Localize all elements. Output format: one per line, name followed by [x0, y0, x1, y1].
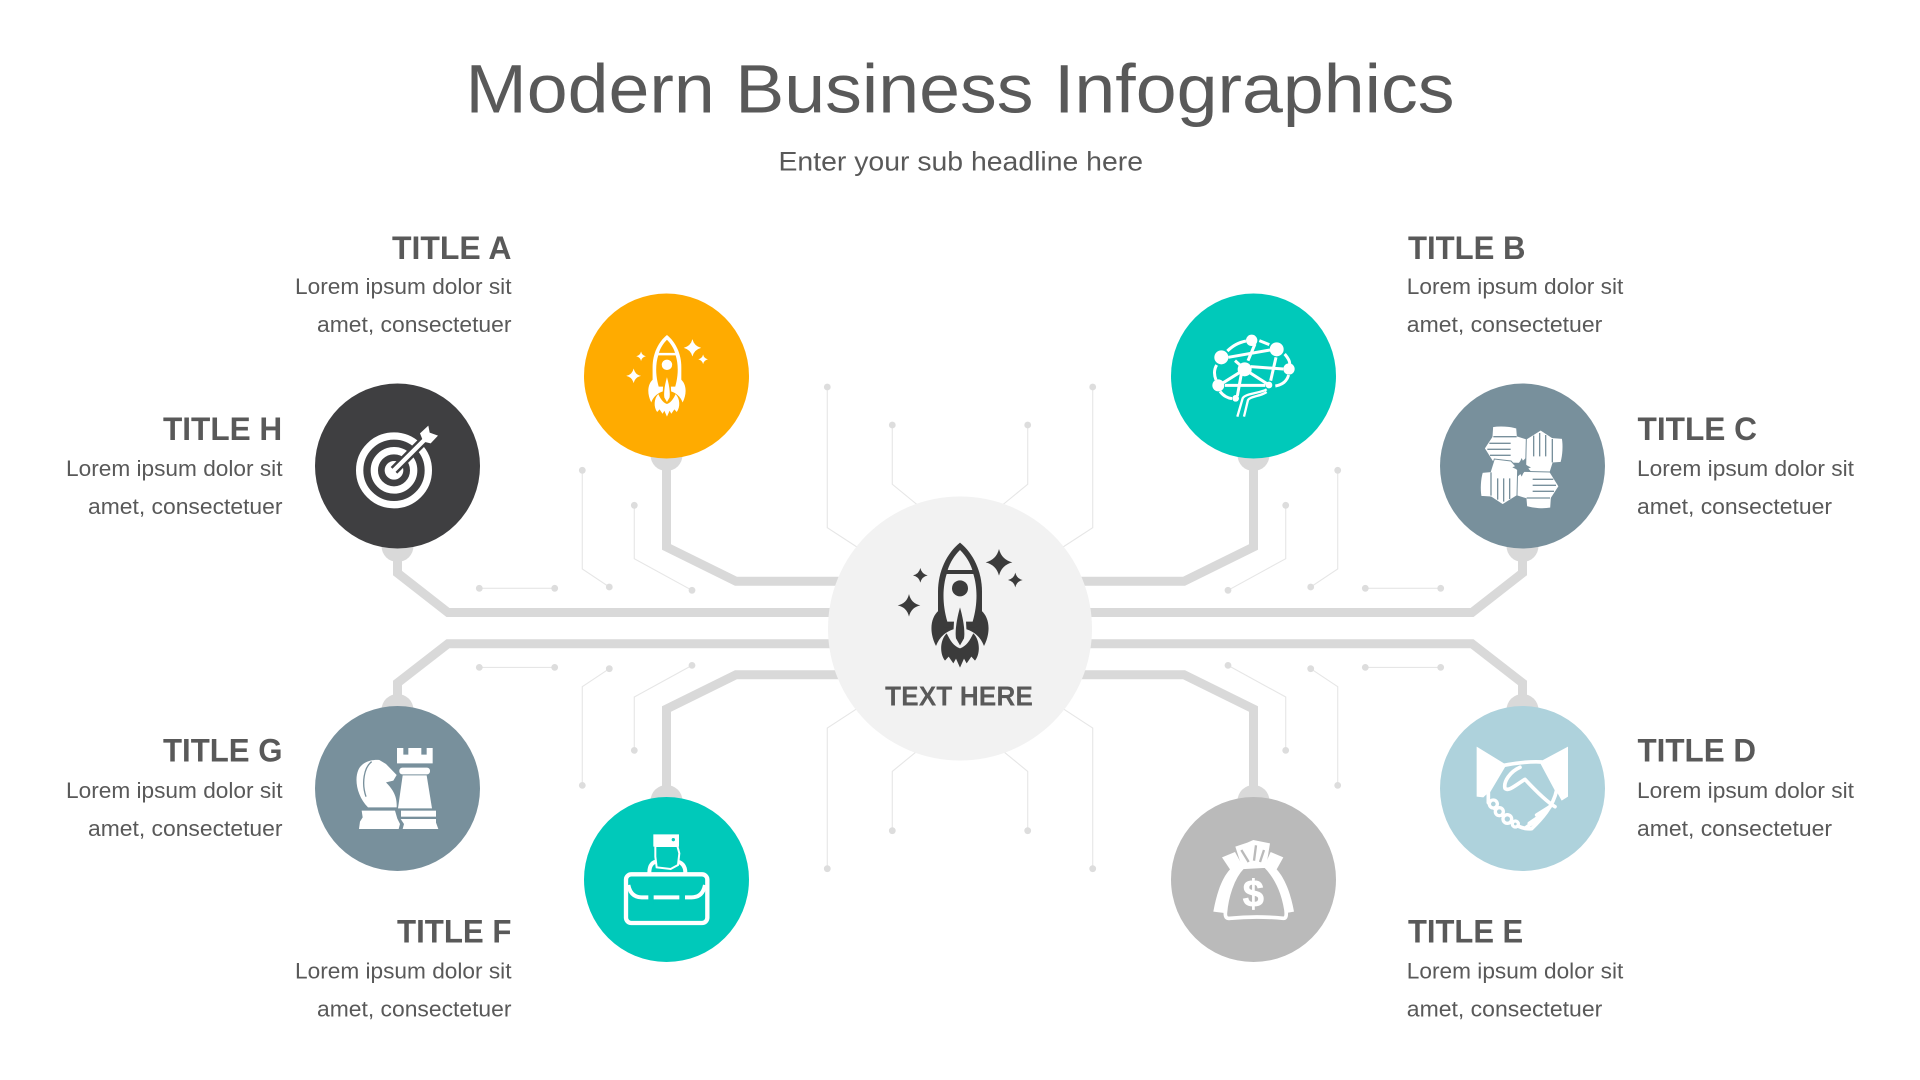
- central label: TEXT HERE: [885, 681, 1033, 712]
- icon: central rocket: [898, 543, 1023, 668]
- text: Title H: Lorem ipsum dolor sit: [66, 456, 282, 481]
- node E: grey circle with money bag: [1171, 797, 1336, 962]
- text: Title B: Lorem ipsum dolor sit: [1407, 274, 1623, 299]
- text: Title E: Lorem ipsum dolor sit: [1407, 959, 1623, 984]
- node H: dark circle with target: [315, 384, 480, 548]
- text: Title H: amet, consectetuer: [88, 494, 282, 519]
- node A: orange circle with rocket: [584, 294, 749, 458]
- icon: money bag: $: [1243, 874, 1264, 916]
- text: Title D: amet, consectetuer: [1637, 816, 1832, 841]
- text: Title D: Lorem ipsum dolor sit: [1637, 778, 1854, 803]
- icon: briefcase in hand: [626, 834, 707, 923]
- text: Title A: TITLE A: [392, 230, 512, 266]
- node F: teal circle with briefcase: [584, 797, 749, 962]
- icon: target with arrow: [360, 426, 438, 505]
- node D: light blue circle with handshake: [1440, 706, 1605, 871]
- text: Title D: [1637, 733, 1854, 841]
- text: Title E: [1407, 914, 1623, 1022]
- text: Title H: TITLE H: [163, 411, 282, 447]
- thin circuit traces: [476, 384, 1444, 872]
- icon: money bag: [1213, 840, 1294, 918]
- text: Title C: [1637, 411, 1854, 519]
- node C: slate circle with hands: [1440, 384, 1605, 548]
- text: Title C: TITLE C: [1638, 411, 1757, 447]
- icon: rocket: [626, 335, 708, 417]
- text: Title A: [295, 230, 512, 337]
- subtitle: Enter your sub headline here: [778, 147, 1143, 177]
- node G: slate circle with chess pieces: [315, 706, 480, 871]
- text: Title F: amet, consectetuer: [317, 997, 512, 1022]
- text: Title H: [66, 411, 282, 519]
- text: Title A: amet, consectetuer: [317, 312, 512, 337]
- text: Title G: amet, consectetuer: [88, 816, 282, 841]
- text: Title E: amet, consectetuer: [1407, 997, 1602, 1022]
- text: Title F: TITLE F: [397, 914, 512, 950]
- icon: chess knight and rook: [356, 748, 438, 829]
- node B: teal circle with brain: [1171, 294, 1336, 458]
- text: Title B: [1407, 230, 1623, 337]
- icon: handshake: [1477, 747, 1568, 829]
- text: Title C: amet, consectetuer: [1637, 494, 1832, 519]
- text: Title B: TITLE B: [1408, 230, 1526, 266]
- text: Title B: amet, consectetuer: [1407, 312, 1602, 337]
- text: Title G: [66, 733, 282, 841]
- thick connectors from hub to circles: [382, 439, 1538, 817]
- text: Title F: [295, 914, 512, 1022]
- text: Title C: Lorem ipsum dolor sit: [1637, 456, 1854, 481]
- text: Title E: TITLE E: [1408, 914, 1523, 950]
- text: Title G: TITLE G: [163, 733, 282, 769]
- text: Title F: Lorem ipsum dolor sit: [295, 959, 512, 984]
- central hub: [828, 496, 1092, 760]
- icon: brain network: [1212, 335, 1295, 417]
- icon: four hands: [1480, 426, 1563, 509]
- text: Title A: Lorem ipsum dolor sit: [295, 274, 512, 299]
- title: Modern Business Infographics: [466, 51, 1454, 128]
- text: Title D: TITLE D: [1638, 733, 1756, 769]
- text: Title G: Lorem ipsum dolor sit: [66, 778, 282, 803]
